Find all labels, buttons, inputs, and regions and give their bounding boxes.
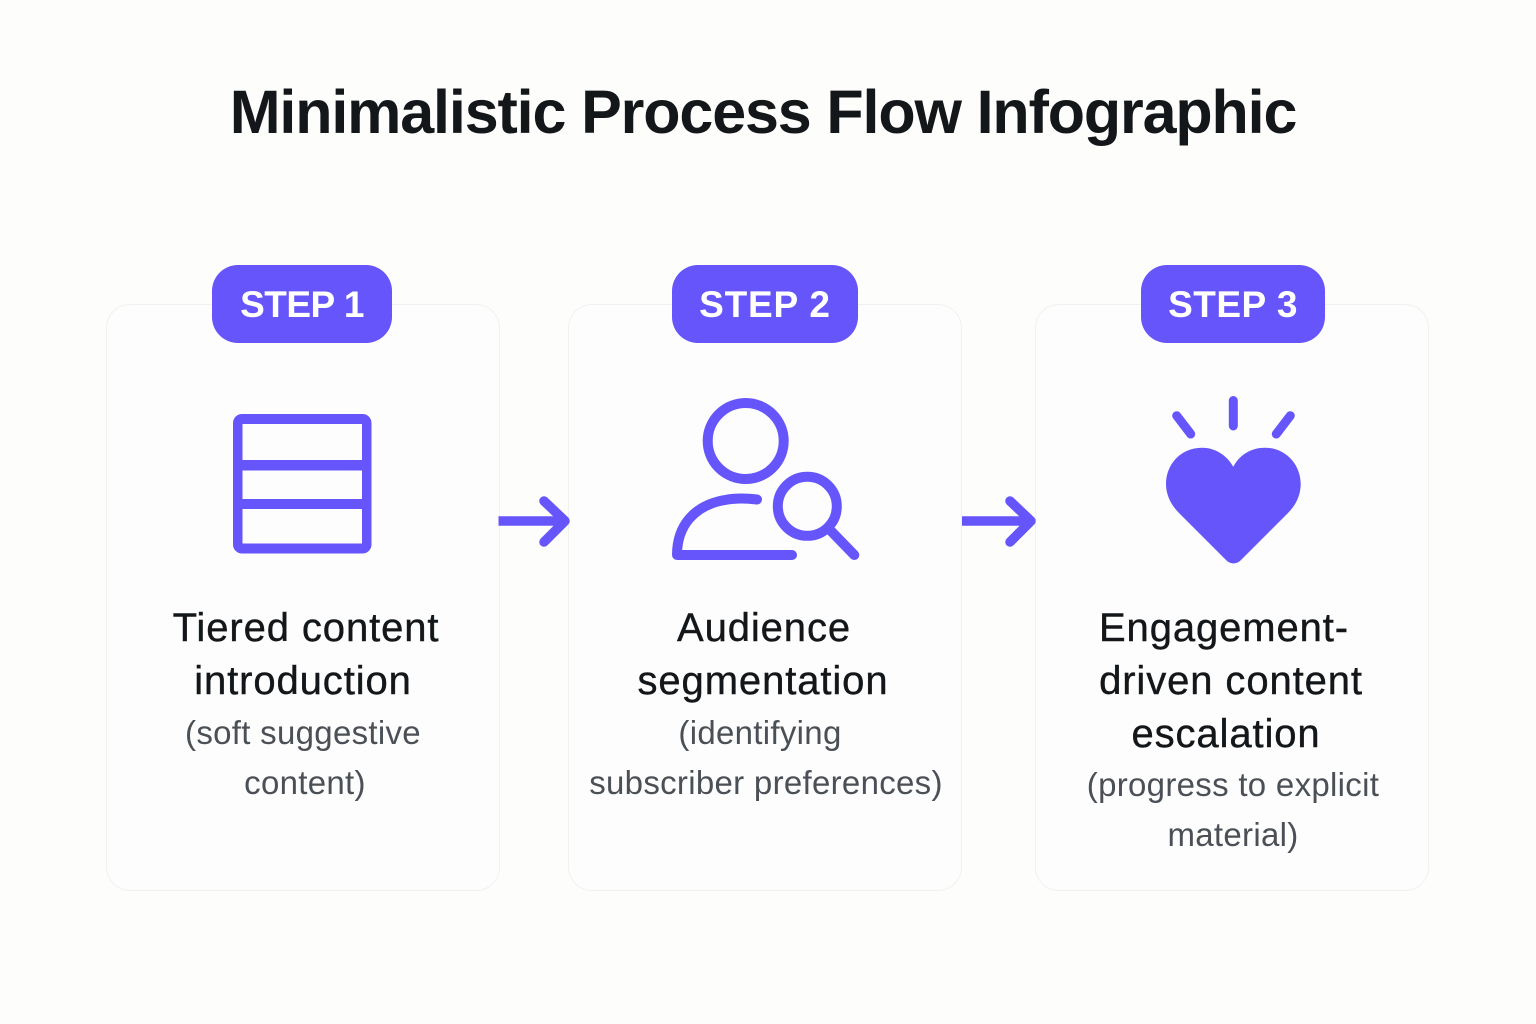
text: step 3 detail: (progress to explicit xyxy=(1087,766,1379,803)
badge: step 1: STEP 1 xyxy=(240,284,364,325)
text: step 1 heading: Tiered content xyxy=(173,606,439,650)
panel: step 2 card xyxy=(568,304,962,891)
text: step 2 heading: Audience xyxy=(677,606,851,650)
text: step 3 heading: Engagement- xyxy=(1099,606,1349,650)
badge: step 2 xyxy=(672,265,858,343)
text: step 2 detail: (identifying xyxy=(678,714,842,751)
text: step 1 heading line 2: introduction xyxy=(194,659,412,703)
panel: step 3 card xyxy=(1035,304,1429,891)
title: Minimalistic Process Flow Infographic xyxy=(230,78,1296,146)
text: step 3 heading line 3: escalation xyxy=(1131,712,1321,756)
text: step 1 detail line 2: content) xyxy=(244,764,366,801)
arrow: step 2 to step 3 xyxy=(962,496,1036,547)
text: step 2 detail line 2: subscriber preferences) xyxy=(589,764,943,801)
badge: step 3 xyxy=(1141,265,1325,343)
text: step 2 heading line 2: segmentation xyxy=(638,659,888,703)
icon: heart with rays xyxy=(1166,396,1301,564)
text: step 1 detail: (soft suggestive xyxy=(185,714,421,751)
panel: step 1 card xyxy=(106,304,500,891)
badge: step 2: STEP 2 xyxy=(699,284,831,325)
icon: stacked tiers xyxy=(233,414,372,554)
text: step 3 heading line 2: driven content xyxy=(1099,659,1363,703)
arrow: step 1 to step 2 xyxy=(498,496,570,547)
badge: step 3: STEP 3 xyxy=(1168,284,1298,325)
icon: user with magnifier xyxy=(672,398,860,560)
badge: step 1 xyxy=(212,265,392,343)
text: step 3 detail line 2: material) xyxy=(1167,816,1299,853)
